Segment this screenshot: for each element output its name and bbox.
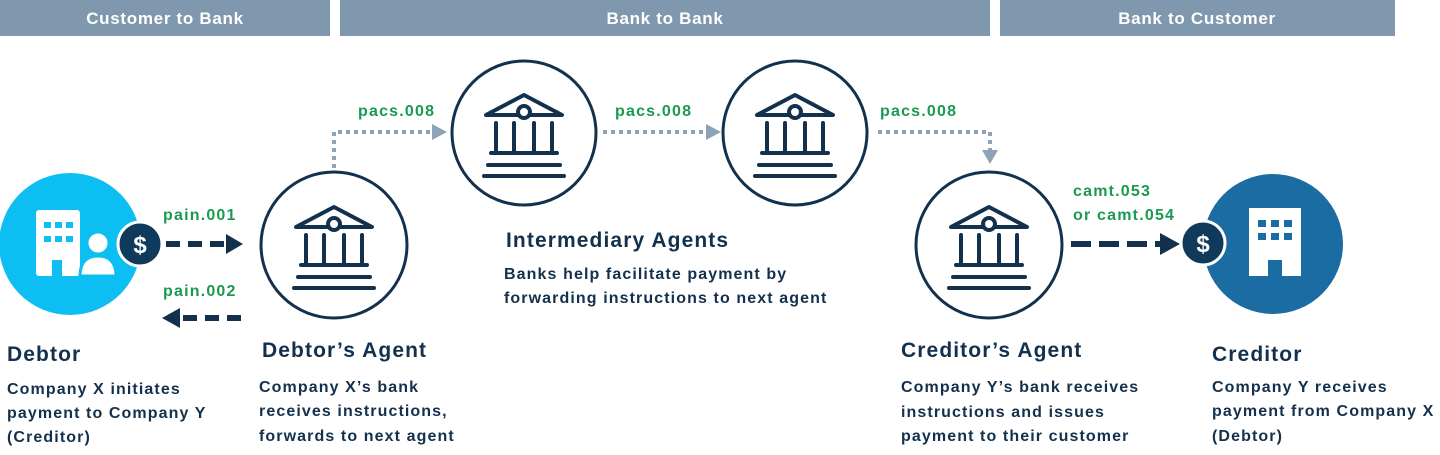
- text: debtor's agent: receives instructions,: [259, 403, 448, 420]
- arrow: camt: [1071, 183, 1180, 255]
- text: debtor: (Creditor): [7, 429, 91, 446]
- text: intermediary agents: Intermediary Agents: [506, 229, 729, 252]
- text: creditor's agent: [901, 339, 1139, 445]
- header: Customer to Bank: Customer to Bank: [86, 9, 244, 28]
- arrow: pain.001: [163, 207, 243, 254]
- icon: intermediary bank 2: [723, 61, 867, 205]
- arrow: pacs.008 2: pacs.008: [615, 103, 692, 120]
- header: Customer to Bank: [0, 0, 330, 36]
- icon: intermediary bank 1: [452, 61, 596, 205]
- text: creditor: payment from Company X: [1212, 403, 1434, 420]
- header: Bank to Bank: [340, 0, 990, 36]
- text: creditor: (Debtor): [1212, 428, 1283, 445]
- header: Bank to Bank: Bank to Bank: [606, 9, 724, 28]
- text: debtor: payment to Company Y: [7, 405, 207, 422]
- text: intermediary agents: [504, 229, 827, 307]
- text: creditor: Company Y receives: [1212, 379, 1388, 396]
- text: creditor: Creditor: [1212, 343, 1302, 366]
- arrow: camt: camt.053: [1073, 183, 1151, 200]
- text: debtor: [7, 343, 207, 446]
- arrow: camt: or camt.054: [1073, 207, 1175, 224]
- arrow: pacs.008 2: [603, 103, 721, 140]
- icon: debtor: [0, 173, 162, 315]
- text: debtor: Company X initiates: [7, 381, 181, 398]
- text: creditor: [1212, 343, 1434, 445]
- arrow: pain.002: [162, 283, 241, 328]
- text: debtor's agent: Company X’s bank: [259, 379, 419, 396]
- icon: debtor: $: [133, 232, 147, 259]
- text: creditor's agent: instructions and issues: [901, 404, 1105, 421]
- text: debtor: Debtor: [7, 343, 81, 366]
- arrow: pain.001: pain.001: [163, 207, 237, 224]
- header: Bank to Customer: [1000, 0, 1395, 36]
- arrow: pacs.008 3: pacs.008: [880, 103, 957, 120]
- text: creditor's agent: payment to their customer: [901, 428, 1129, 445]
- text: creditor's agent: Creditor’s Agent: [901, 339, 1082, 362]
- icon: creditor: [1181, 174, 1343, 314]
- arrow: pacs.008 3: [878, 103, 998, 164]
- arrow: pacs.008 1: pacs.008: [358, 103, 435, 120]
- arrow: pacs.008 1: [334, 103, 447, 168]
- header: Bank to Customer: Bank to Customer: [1118, 9, 1276, 28]
- text: debtor's agent: forwards to next agent: [259, 428, 455, 445]
- icon: debtor's agent bank: [261, 172, 407, 318]
- text: intermediary agents: forwarding instructions to next agent: [504, 290, 827, 307]
- icon: creditor: $: [1196, 231, 1210, 258]
- text: intermediary agents: Banks help facilitate payment by: [504, 266, 787, 283]
- text: debtor's agent: [259, 339, 455, 445]
- text: creditor's agent: Company Y’s bank receives: [901, 379, 1139, 396]
- arrow: pain.002: pain.002: [163, 283, 237, 300]
- icon: creditor's agent bank: [916, 172, 1062, 318]
- text: debtor's agent: Debtor’s Agent: [262, 339, 427, 362]
